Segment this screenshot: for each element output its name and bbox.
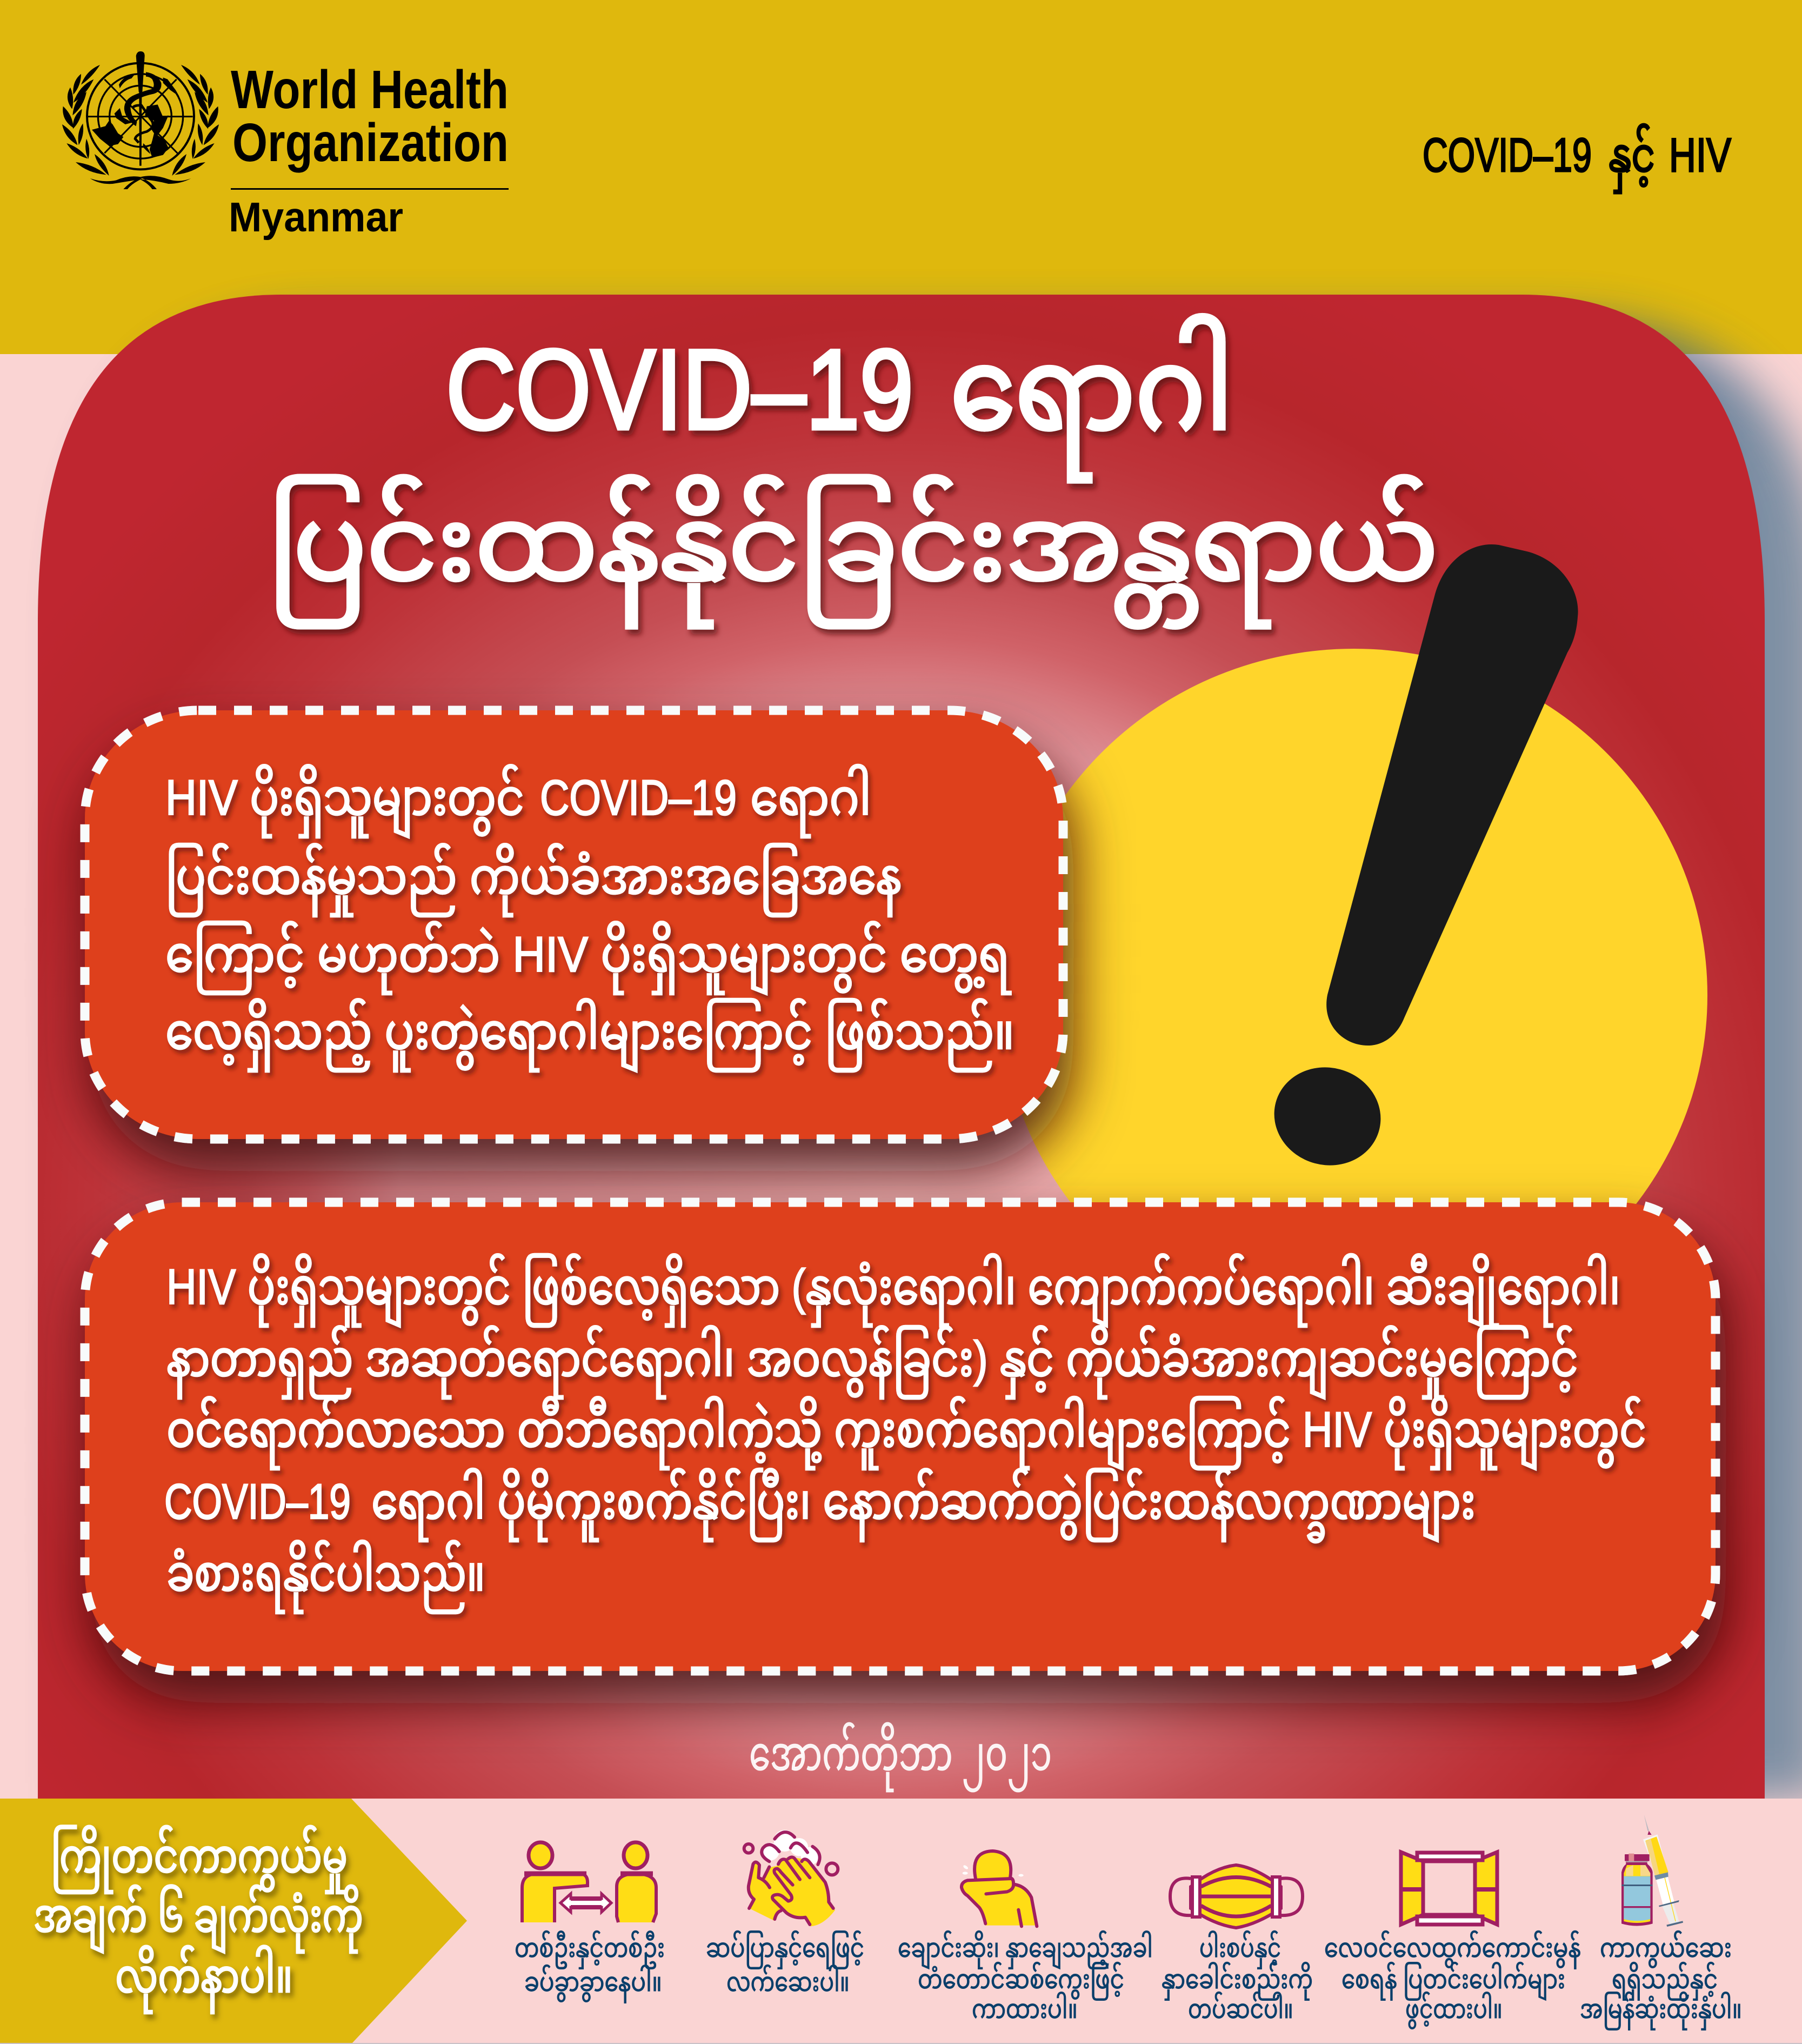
callout text 1: ပြင်းထန်မှုသည် ကိုယ်ခံအားအခြေအနေ [165,843,902,917]
WHO logo [62,51,509,241]
caption: physical distance: တစ်ဦးနှင့်တစ်ဦး [515,1930,665,1969]
title line 1: COVID–19 [446,326,913,453]
caption: face mask: နှာခေါင်းစည်းကို [1162,1962,1313,2000]
date: အောက်တိုဘာ ၂၀၂၁ [749,1722,1052,1792]
header tag: COVID-19 and HIV: COVID–19 [1423,128,1592,182]
panel shadow [76,319,1802,1799]
caption: handwashing [706,1930,864,1997]
top yellow header band [0,0,1802,354]
callout text 1: HIV ပိုးရှိသူများတွင် [165,764,524,838]
callout text 2: COVID–19 [164,1474,351,1529]
icon: face mask [1170,1865,1303,1928]
caption: physical distance [515,1930,665,2003]
prevention heading text: ကြိုတင်ကာကွယ်မှု [51,1826,348,1894]
caption: cough into elbow: ချောင်းဆိုး၊ နှာချေသည့်အခါ [898,1930,1153,1969]
panel: callout box 1 [85,710,1063,1139]
callout text 1 [165,764,1015,1072]
caption: vaccine: အမြန်ဆုံးထိုးနှံပါ။ [1580,1992,1742,2030]
caption: open window: လေဝင်လေထွက်ကောင်းမွန် [1324,1930,1581,1969]
icon: cough into elbow [962,1851,1037,1926]
caption: vaccine: ကာကွယ်ဆေး [1600,1930,1732,1968]
header tag: COVID-19 and HIV: HIV [1669,128,1731,182]
header tag: COVID-19 and HIV [1423,124,1731,194]
callout text 2: နာတာရှည် အဆုတ်ရောင်ရောဂါ၊ အဝလွန်ခြင်း) နှင့် ကိုယ်ခံအားကျဆင်းမှုကြောင့် [166,1326,1578,1399]
callout text 2: ရောဂါ ပိုမိုကူးစက်နိုင်ပြီး၊ နောက်ဆက်တွဲပြင်းထန်လက္ခဏာများ [371,1468,1476,1543]
icon: physical distance [522,1842,656,1922]
callout text 2: HIV ပိုးရှိသူများတွင် [1303,1396,1646,1470]
callout text 1: ကြောင့် မဟုတ်ဘဲ HIV ပိုးရှိသူများတွင် တွေ့ရ [165,921,1011,995]
icon: yellow circle with exclamation mark [1000,544,1707,1342]
callout text 2: ဝင်ရောက်လာသော တီဘီရောဂါကဲ့သို့ ကူးစက်ရောဂါများကြောင့် [166,1396,1291,1470]
caption: face mask [1162,1930,1313,2024]
callout text 1: COVID–19 [540,770,737,825]
caption: cough into elbow: တံတောင်ဆစ်ကွေးဖြင့် [918,1962,1124,2000]
title line 2: ပြင်းထန်နိုင်ခြင်းအန္တရာယ် [268,475,1438,628]
prevention heading text: လိုက်နာပါ။ [115,1946,293,2014]
caption: face mask: တပ်ဆင်ပါ။ [1188,1992,1293,2024]
caption: open window [1324,1930,1581,2029]
panel: red main panel [38,295,1765,1799]
caption: open window: ဖွင့်ထားပါ။ [1405,1992,1503,2029]
caption: face mask: ပါးစပ်နှင့် [1199,1930,1281,1969]
caption: open window: စေရန် ပြတင်းပေါက်များ [1342,1962,1565,2000]
icon: WHO emblem [62,51,219,189]
title line 1: ရောဂါ [950,315,1233,482]
title line 1 [446,315,1233,482]
caption: cough into elbow [898,1930,1153,2024]
wordmark: Myanmar: Myanmar [229,194,403,241]
bottom pink band [0,1799,1802,2044]
prevention heading text [34,1826,363,2014]
callout text 2: ခံစားရနိုင်ပါသည်။ [166,1540,485,1614]
wordmark: Organization: Organization [232,112,509,173]
title [268,315,1438,628]
caption: physical distance: ခပ်ခွာခွာနေပါ။ [524,1965,662,2003]
arrow panel: prevention heading [0,1799,467,2044]
wordmark: World Health: World Health [231,59,509,120]
icon: handwashing [744,1830,838,1926]
icon: vaccine vial and syringe [1621,1815,1683,1927]
caption: vaccine: ရရှိသည်နှင့် [1612,1962,1718,2000]
caption: vaccine [1580,1930,1742,2030]
header tag: COVID-19 and HIV: နှင့် [1609,124,1655,194]
icon: open window [1401,1852,1497,1925]
caption: handwashing: လက်ဆေးပါ။ [726,1965,850,1997]
panel: callout box 2 [85,1202,1716,1671]
caption: handwashing: ဆပ်ပြာနှင့်ရေဖြင့် [706,1930,864,1969]
callout text 2 [164,1254,1646,1614]
callout text 1: လေ့ရှိသည့် ပူးတွဲရောဂါများကြောင့် ဖြစ်သည်။ [165,998,1015,1072]
prevention heading text: အချက် ၆ ချက်လုံးကို [34,1885,363,1954]
caption: cough into elbow: ကာထားပါ။ [972,1992,1078,2024]
callout text 1: ရောဂါ [750,765,871,838]
